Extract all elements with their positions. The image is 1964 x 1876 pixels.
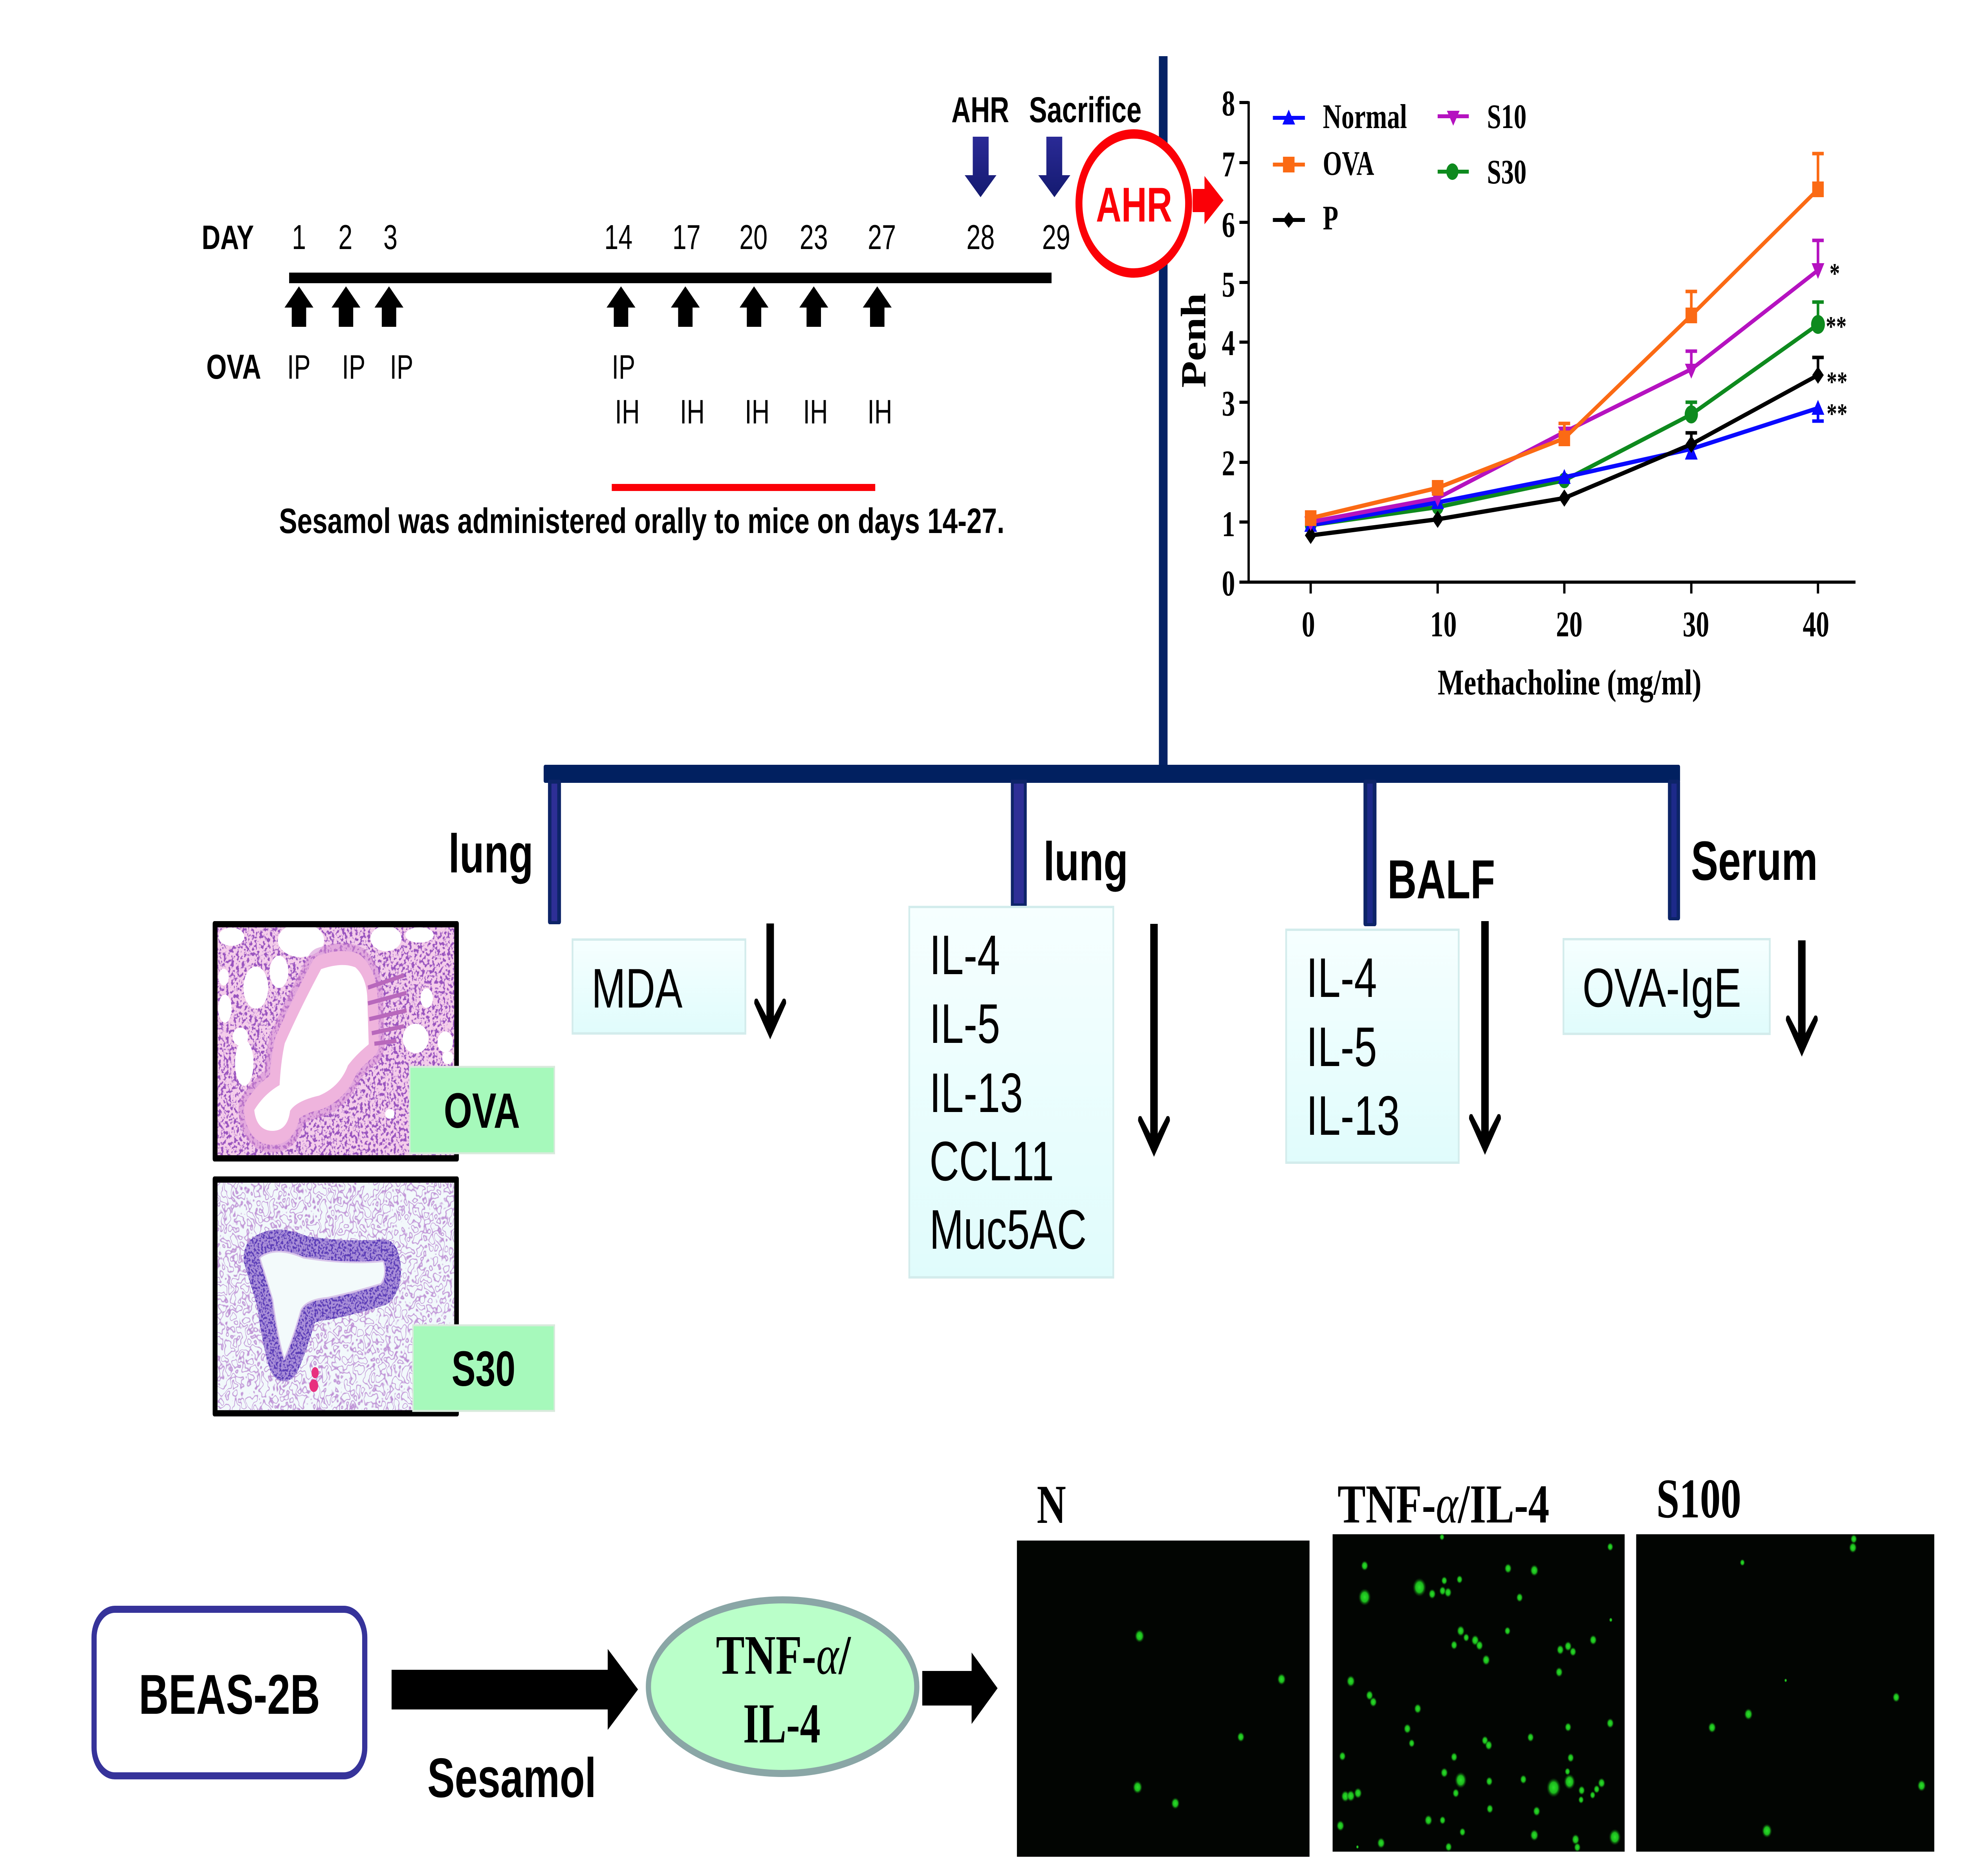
y axis tick labels: 0 [1222, 564, 1235, 604]
y axis tick labels: 7 [1222, 145, 1235, 185]
IH labels: IH [615, 393, 640, 431]
x axis tick labels: 30 [1683, 605, 1709, 645]
heading: lung MDA branch: lung [449, 823, 533, 884]
panel: BEAS-2B cell line [94, 1609, 365, 1776]
sesamol dosing period line [612, 484, 875, 491]
IP labels: IP [342, 348, 365, 386]
significance markers: ** [1827, 398, 1847, 429]
y axis tick labels: 1 [1222, 504, 1235, 544]
callout: AHR ellipse: AHR [1096, 178, 1172, 232]
day numbers: 2 [338, 218, 352, 256]
IP labels: IP [612, 348, 635, 386]
panel: MDA box: MDA [592, 957, 682, 1020]
x axis tick labels: 40 [1803, 605, 1829, 645]
arrow: sesamol treatment [392, 1649, 638, 1730]
heading: lung cytokine branch: lung [1043, 831, 1128, 892]
arrow: MDA decrease [754, 923, 786, 1039]
day numbers [292, 218, 1070, 256]
panel: TNF-alpha / IL-4 stimulus: TNF-α/ [716, 1624, 851, 1686]
sesamol dosing note: Sesamol was administered orally to mice on days 14-27. [279, 501, 1004, 540]
legend: Normal [1323, 97, 1407, 136]
icon: blue arrow sacrifice [1038, 137, 1070, 197]
y axis tick labels [1222, 84, 1235, 604]
icons: upward injection arrows [284, 286, 892, 327]
panel: BALF cytokines box: IL-5 [1306, 1016, 1377, 1078]
panel: TNF-alpha / IL-4 stimulus [649, 1600, 917, 1773]
significance markers: ** [1826, 311, 1847, 342]
IH labels: IH [867, 393, 892, 431]
label: sesamol: Sesamol [427, 1747, 596, 1809]
label: sacrifice time point: Sacrifice [1029, 90, 1141, 130]
legend: S30 [1487, 152, 1526, 191]
day numbers: 20 [739, 218, 768, 256]
panel: OVA-IgE box: OVA-IgE [1583, 958, 1741, 1019]
main vertical connector [1159, 56, 1167, 783]
arrow: OVA-IgE decrease [1786, 940, 1818, 1057]
significance markers: ** [1827, 366, 1847, 398]
day numbers: 3 [383, 218, 398, 256]
series: S10 [1304, 240, 1824, 531]
IP labels: IP [390, 348, 413, 386]
icon: blue arrow AHR [965, 137, 997, 197]
y axis tick labels: 5 [1222, 265, 1235, 305]
panel: fluorescence S100 [1636, 1534, 1934, 1852]
IH labels [615, 393, 892, 431]
y axis tick labels: 8 [1222, 84, 1235, 124]
panel: lung cytokines box: IL-5 [929, 993, 1000, 1055]
micrograph: S30 lung section [218, 1183, 454, 1410]
panel: lung histology S30 [213, 1176, 554, 1416]
x axis tick labels: 20 [1556, 605, 1583, 645]
IP labels: IP [287, 348, 311, 386]
day numbers: 17 [672, 218, 701, 256]
panel: fluorescence TNF-alpha/IL-4 [1333, 1533, 1625, 1852]
heading: serum branch: Serum [1691, 830, 1818, 892]
day numbers: 28 [966, 218, 995, 256]
panel: MDA box [573, 940, 746, 1033]
y axis tick labels: 4 [1222, 323, 1235, 363]
x axis title: Methacholine (mg/ml) [1438, 663, 1701, 703]
y axis tick labels: 6 [1222, 205, 1235, 245]
heading: BALF branch: BALF [1387, 849, 1495, 911]
panel: lung cytokines box: CCL11 [929, 1130, 1054, 1193]
panel: lung cytokines box: Muc5AC [929, 1198, 1086, 1261]
axes [1239, 101, 1856, 594]
panel: treatment timeline [202, 90, 1141, 540]
horizontal branch connector with stems [544, 765, 1680, 926]
chart: Penh line chart [1174, 84, 1856, 703]
label: S30 [413, 1325, 554, 1411]
heading: day row label: DAY [202, 218, 254, 256]
y axis title: Penh [1174, 293, 1213, 388]
arrow: AHR to chart [1193, 176, 1224, 224]
x axis tick labels: 10 [1430, 605, 1457, 645]
series: OVA [1305, 154, 1824, 526]
day numbers: 14 [604, 218, 632, 256]
y axis tick labels: 2 [1222, 443, 1235, 484]
panel: fluorescence N [1017, 1541, 1310, 1857]
significance markers [1826, 258, 1847, 429]
legend: OVA [1323, 144, 1374, 182]
label: AHR time point: AHR [951, 90, 1009, 130]
label: OVA row: OVA [206, 348, 261, 386]
label: OVA [410, 1067, 554, 1153]
legend: P [1323, 198, 1338, 237]
heading: S100: S100 [1656, 1467, 1741, 1530]
arrow: lung cytokines decrease [1138, 924, 1170, 1157]
IP labels [287, 348, 635, 386]
panel: lung cytokines box: IL-13 [929, 1062, 1023, 1124]
panel: TNF-alpha / IL-4 stimulus: IL-4 [743, 1692, 821, 1755]
day numbers: 1 [292, 218, 306, 256]
day numbers: 23 [800, 218, 828, 256]
panel: BEAS-2B cell line: BEAS-2B [139, 1663, 320, 1726]
IH labels: IH [680, 393, 705, 431]
panel: OVA-IgE box [1563, 939, 1770, 1034]
panel: lung histology OVA [213, 921, 554, 1162]
panel: BALF cytokines box [1286, 930, 1459, 1163]
panel: BALF cytokines box: IL-4 [1306, 947, 1377, 1009]
IH labels: IH [803, 393, 828, 431]
x axis tick labels [1302, 605, 1829, 645]
panel: lung cytokines box [909, 907, 1113, 1277]
micrograph: OVA lung section [218, 923, 454, 1155]
arrow: BALF cytokines decrease [1469, 921, 1501, 1155]
series: P [1305, 357, 1824, 544]
panel: BALF cytokines box: IL-13 [1306, 1085, 1400, 1147]
heading: TNF-alpha/IL-4: TNF-α/IL-4 [1337, 1474, 1549, 1535]
day numbers: 27 [868, 218, 896, 256]
legend [1273, 97, 1526, 237]
series: S30 [1305, 302, 1825, 533]
significance markers: * [1830, 258, 1840, 289]
label: OVA: OVA [444, 1083, 520, 1138]
IH labels: IH [745, 393, 769, 431]
heading: N: N [1037, 1474, 1066, 1535]
callout: AHR ellipse [1079, 134, 1189, 273]
legend: S10 [1487, 97, 1526, 136]
panel: lung cytokines box: IL-4 [929, 924, 1000, 986]
y axis tick labels: 3 [1222, 384, 1235, 424]
x axis tick labels: 0 [1302, 605, 1315, 645]
label: S30: S30 [452, 1341, 515, 1396]
series: Normal [1304, 400, 1824, 532]
timeline bar [289, 273, 1052, 283]
day numbers: 29 [1042, 218, 1070, 256]
arrow: to fluorescence panels [922, 1652, 998, 1724]
